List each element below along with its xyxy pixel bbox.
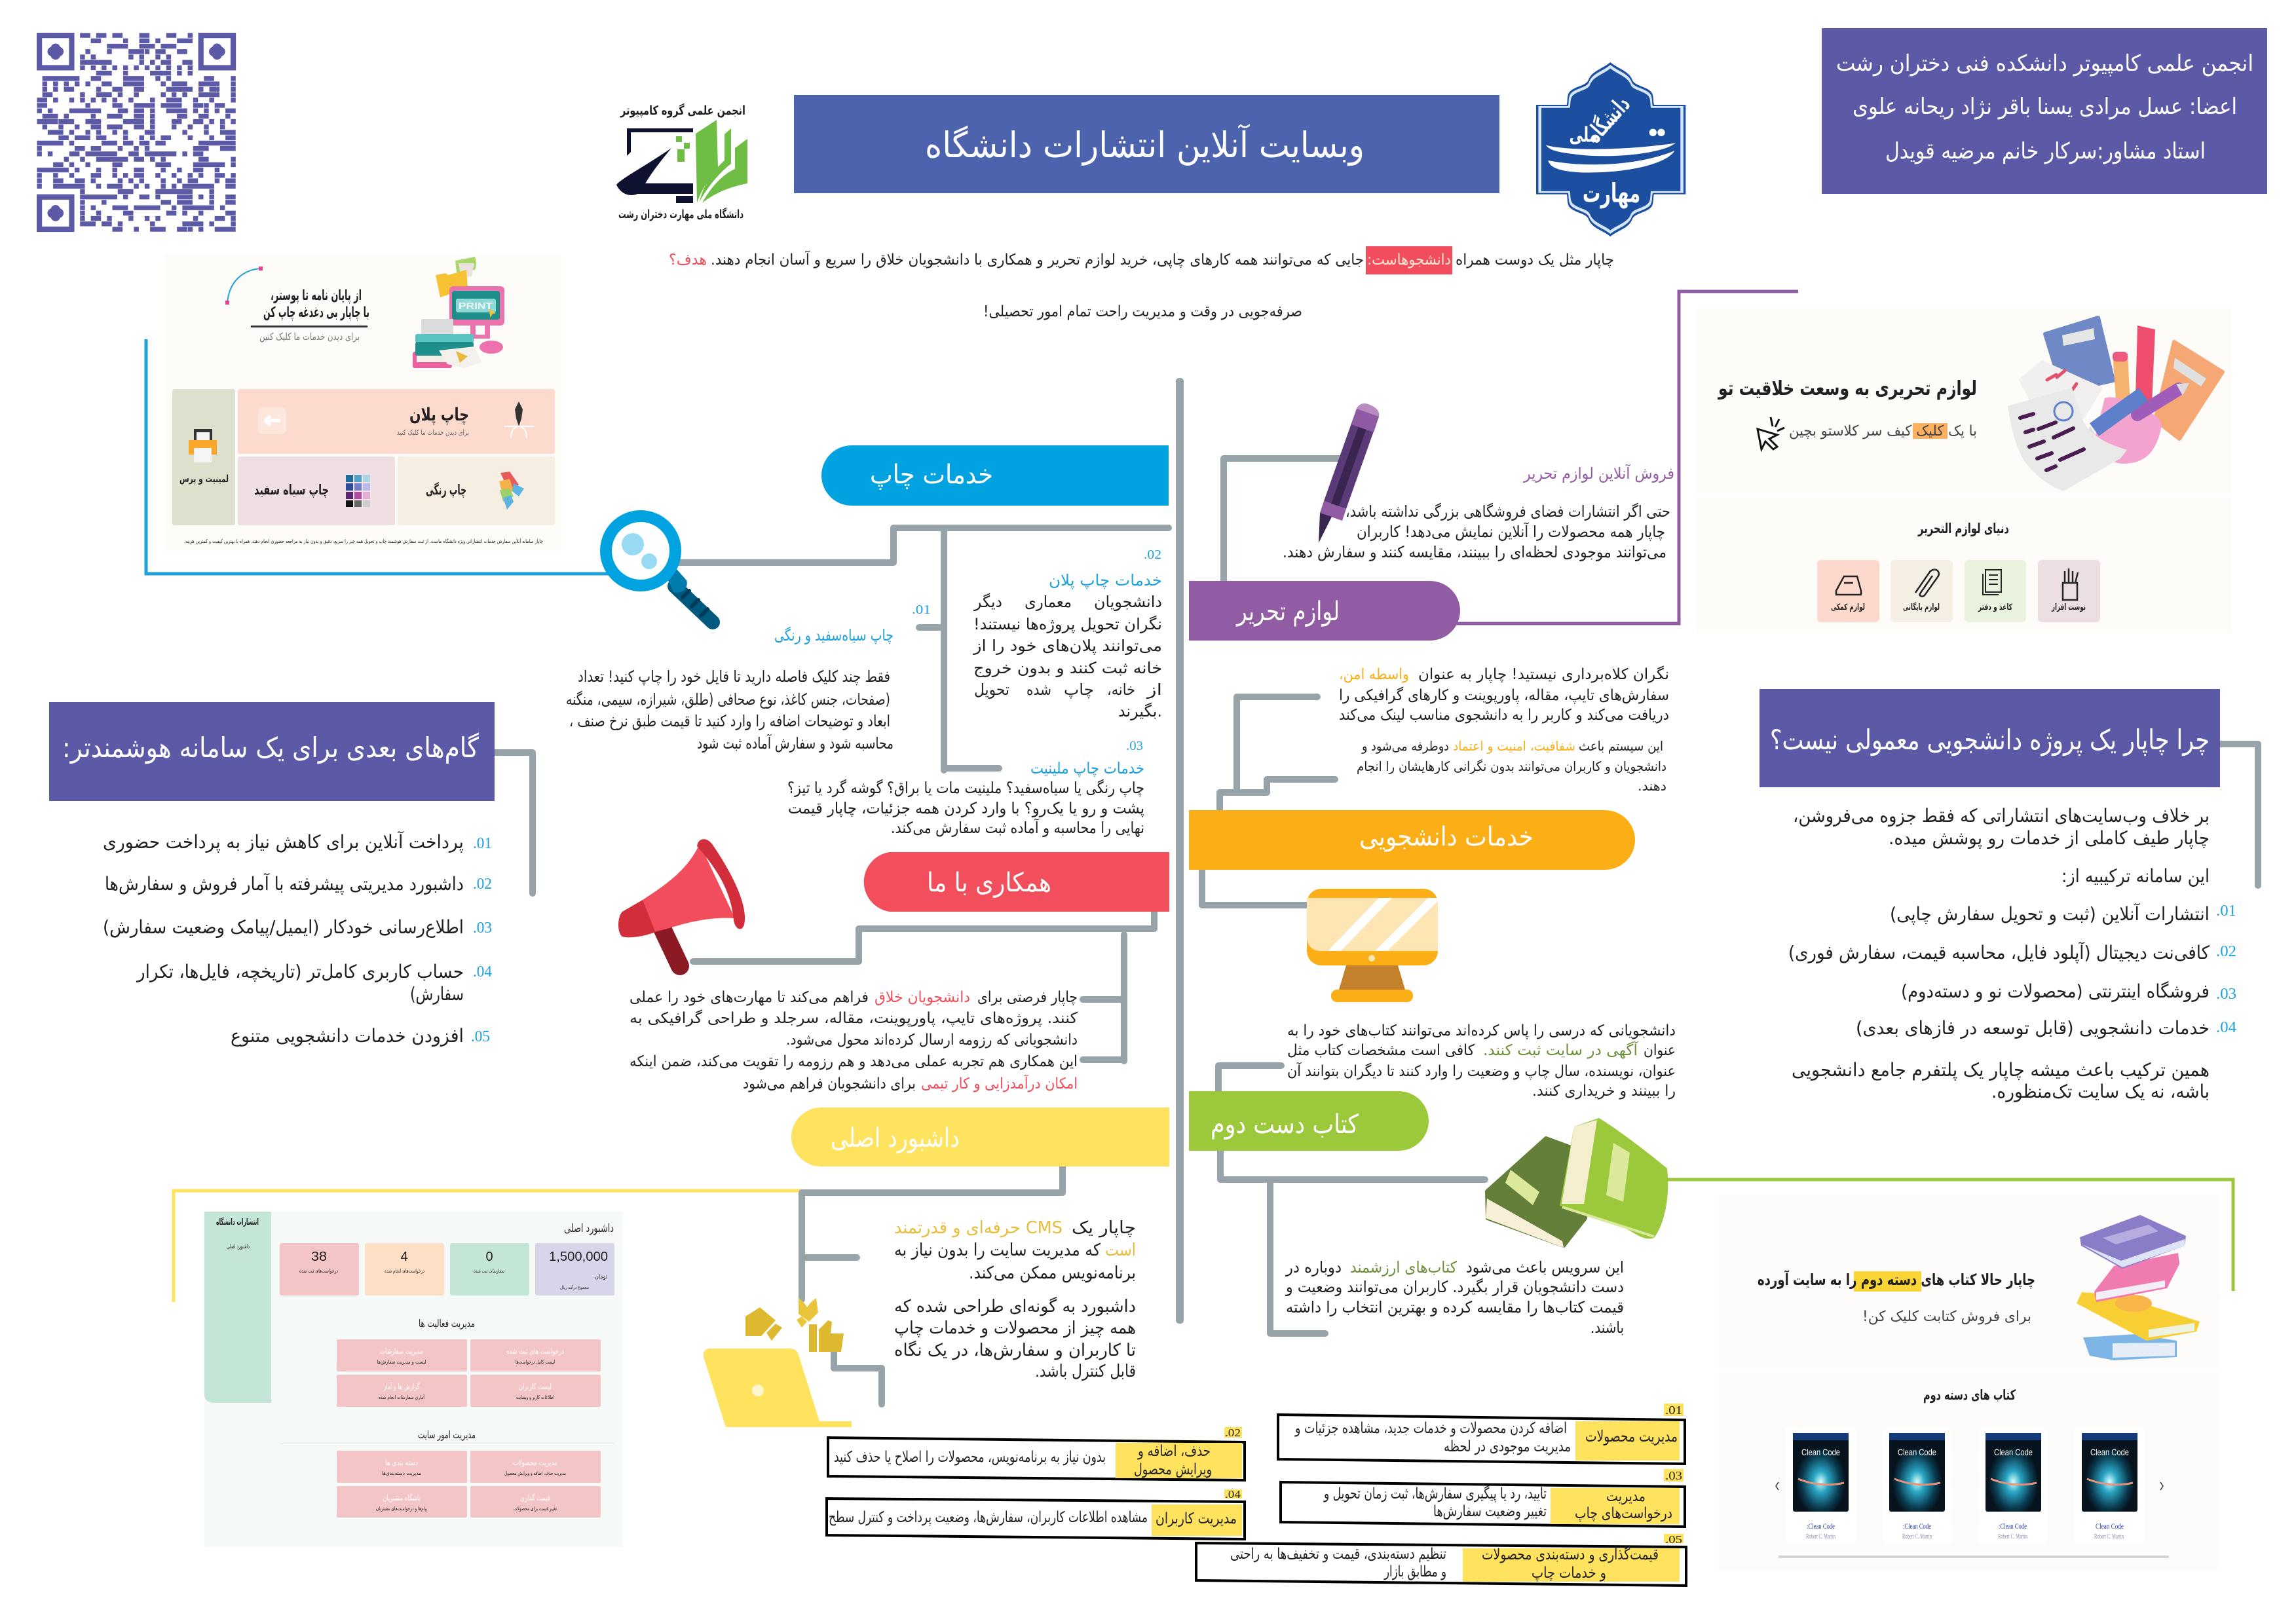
list: next steps: سفارش) — [410, 983, 464, 1005]
site management tiles — [337, 1451, 601, 1518]
book carousel: Robert C. Martin — [1806, 1533, 1835, 1540]
text: online stationery sales: فروش آنلاین لوازم تحریر — [1523, 464, 1674, 483]
box: product management: مدیریت موجودی در لحظه — [1444, 1438, 1571, 1455]
activity management tiles: اطلاعات کاربر و وبسایت — [516, 1394, 554, 1400]
text: plan printing: دیگر — [973, 593, 1002, 611]
category tiles: لوازم کمکی — [1831, 603, 1865, 612]
box: pricing and categories — [1196, 1533, 1686, 1586]
heading: print promo — [225, 267, 369, 343]
book carousel: Clean Code — [1898, 1447, 1936, 1457]
text: valuable books: دست دانشجویان قرار بگیرد. کاربران می‌توانند وضعیت و — [1285, 1278, 1624, 1296]
icon: green books — [1486, 1118, 1668, 1248]
logo: computer association — [616, 103, 747, 221]
text: plan printing: خانه، — [1107, 680, 1135, 699]
text: secure mediator — [1339, 665, 1669, 794]
site management tiles: تغییر قیمت برای محصولات — [514, 1506, 557, 1512]
list: next steps: داشبورد مدیریتی پیشرفته با آمار فروش و سفارش‌ها — [105, 873, 464, 895]
intro text: صرفه‌جویی در وقت و مدیریت راحت تمام امور تحصیلی! — [983, 303, 1302, 320]
site management tiles: پیام‌ها و درخواست‌های مشتریان — [376, 1506, 427, 1512]
pill: stationery — [1189, 581, 1460, 641]
heading: next steps: گام‌های بعدی برای یک سامانه هوشمندتر: — [62, 732, 479, 764]
text: second-hand book listing — [1287, 1022, 1676, 1100]
icon: laptop with thumbs up — [704, 1298, 852, 1427]
box: product management — [1278, 1404, 1685, 1464]
book carousel: :Clean Code — [1807, 1521, 1835, 1531]
text: black and white and colour printing — [566, 603, 931, 753]
tile: lamination: لمینیت و پرس — [179, 473, 229, 485]
header: team info: اعضا: عسل مرادی یسنا باقر نژاد ریحانه علوی — [1853, 94, 2237, 120]
box: edit products: حذف، اضافه و — [1137, 1443, 1211, 1460]
text: lamination printing: نهایی را محاسبه و آماده ثبت سفارش می‌کند. — [891, 818, 1144, 837]
text: second-hand book listing: آگهی در سایت ثبت کنند. — [1483, 1041, 1639, 1059]
box: product management: اضافه کردن محصولات و خدمات جدید، مشاهده جزئیات و — [1294, 1420, 1567, 1437]
sidebar — [204, 1212, 271, 1403]
tile: lamination — [172, 389, 235, 525]
text: secure mediator: این سیستم باعث — [1579, 738, 1663, 754]
icon: pencil — [1319, 403, 1379, 543]
text: valuable books: دوباره در — [1285, 1258, 1342, 1276]
panel: dashboard screenshot — [204, 1212, 623, 1547]
text: collaboration: برای دانشجویان فراهم می‌شود — [743, 1075, 916, 1092]
text: why Chapar description: خدمات دانشجویی (قابل توسعه در فازهای بعدی) — [1856, 1017, 2210, 1039]
book carousel: Clean Code — [1801, 1447, 1840, 1457]
activity management tiles: لیست کاربران — [519, 1382, 552, 1392]
category tiles: لوازم بایگانی — [1903, 602, 1940, 612]
sidebar: انتشارات دانشگاه — [216, 1217, 259, 1227]
stat cards: مجموع درآمد ریال — [560, 1284, 589, 1290]
box: product management: .01 — [1665, 1404, 1682, 1417]
text: second-hand book listing: دانشجویانی که درسی را پاس کرده‌اند می‌توانند کتاب‌های خود را به — [1287, 1022, 1676, 1039]
pill: student services — [1189, 810, 1635, 870]
book carousel: Clean Code — [2090, 1447, 2129, 1457]
stat cards: درخواست‌های ثبت شده — [299, 1268, 338, 1274]
text: collaboration: امکان درآمدزایی و کار تیمی — [921, 1074, 1078, 1092]
book carousel: :Clean Code — [1903, 1521, 1931, 1531]
pill: stationery: لوازم تحریر — [1235, 597, 1340, 627]
text: second-hand book listing: کافی است مشخصات کتاب مثل — [1287, 1042, 1475, 1059]
text: plan printing: شده — [1026, 680, 1051, 699]
heading: print promo: با چاپار بی دغدغه چاپ کن — [263, 305, 369, 321]
book carousel — [1776, 1427, 2169, 1558]
header: team info: استاد مشاور:سرکار خانم مرضیه قویدل — [1885, 138, 2206, 164]
logo: computer association: دانشگاه ملی مهارت دختران رشت — [618, 207, 743, 221]
text: lamination printing: پشت و رو یا یک‌رو؟ با وارد کردن همه جزئیات، چاپار قیمت — [788, 799, 1144, 817]
text: why Chapar description: کافی‌نت دیجیتال (آپلود فایل، محاسبه قیمت، سفارش فوری) — [1788, 942, 2210, 963]
text: black and white and colour printing: ابعاد و توضیحات اضافه را وارد کنید تا قیمت طبق نرخ صنف ، — [569, 712, 890, 730]
text: secure mediator: شفافیت، امنیت و اعتماد — [1453, 738, 1575, 754]
text: collaboration: این همکاری هم تجربه عملی می‌دهد و هم رزومه را تقویت می‌کند، ضمن اینکه — [630, 1053, 1078, 1070]
title banner: وبسایت آنلاین انتشارات دانشگاه — [925, 124, 1364, 166]
list: next steps: پرداخت آنلاین برای کاهش نیاز به پرداخت حضوری — [103, 831, 464, 853]
text: why Chapar description: چاپار طیف کاملی از خدمات رو پوشش میده. — [1889, 827, 2210, 849]
text: secure mediator: سفارش‌های تایپ، مقاله، پاورپوینت و کارهای گرافیکی را — [1339, 686, 1669, 704]
list: next steps: افزودن خدمات دانشجویی متنوع — [231, 1025, 464, 1047]
illustration: stack of books — [2077, 1215, 2200, 1360]
heading: stationery promo: با یک کلیک کیف سر کلاستو بچین — [1789, 423, 1977, 439]
caption: print promo: چاپار سامانه آنلاین سفارش خدمات انتشاراتی ویژه دانشگاه ماست. از ثبت سفارش هوشمند چاپ و تحویل همه چیز را سریع، دقیق و بدون نیاز به مراجعه حضوری انجام دهید. همراه با بهترین کیفیت و کمترین هزینه. — [184, 538, 543, 544]
box: print requests management — [1281, 1469, 1685, 1527]
stat cards: 38 — [311, 1250, 327, 1264]
illustration: printer and monitor — [413, 257, 504, 368]
text: why Chapar description: این سامانه ترکیبیه از: — [2061, 865, 2210, 887]
stat cards: تومان — [595, 1274, 607, 1280]
text: black and white and colour printing: فقط چند کلیک فاصله دارید تا فایل خود را چاپ کنید! تعداد — [578, 667, 890, 686]
pill: collaborate with us: همکاری با ما — [927, 868, 1051, 898]
text: black and white and colour printing: محاسبه شود و سفارش آماده ثبت شود — [697, 734, 894, 753]
text: CMS description — [894, 1218, 1136, 1381]
text: plan printing: معماری — [1025, 593, 1072, 611]
stat cards: 4 — [400, 1250, 408, 1264]
heading: why Chapar: چرا چاپار یک پروژه دانشجویی معمولی نیست؟ — [1770, 724, 2210, 756]
text: lamination printing: .03 — [1126, 739, 1143, 753]
text: lamination printing: چاپ رنگی یا سیاه‌سفید؟ ملینیت مات یا براق؟ گوشه گرد یا تیز؟ — [787, 779, 1144, 797]
box: print requests management: درخواست‌های چاپ — [1575, 1505, 1672, 1522]
list: next steps: اطلاع‌رسانی خودکار (ایمیل/پیامک وضعیت سفارش) — [103, 916, 464, 938]
header: team info — [1822, 28, 2267, 194]
connectors: grey branches — [495, 458, 2258, 1404]
text: plan printing: .بگیرند — [1118, 702, 1162, 720]
text: plan printing: دانشجویان — [1094, 593, 1162, 611]
text: valuable books — [1285, 1258, 1624, 1337]
text: collaboration: فراهم می‌کند تا مهارت‌های خود را عملی — [630, 989, 869, 1006]
tile: black and white printing: چاپ سیاه سفید — [254, 482, 329, 498]
site management tiles: قیمت گذاری — [520, 1493, 550, 1503]
box: pricing and categories: قیمت‌گذاری و دسته‌بندی محصولات — [1482, 1546, 1659, 1563]
list: next steps — [103, 831, 492, 1047]
text: collaboration: چاپار فرصتی برای — [977, 989, 1078, 1006]
logo: university emblem: مهارت — [1583, 178, 1640, 208]
box: print requests management: .03 — [1665, 1469, 1682, 1482]
category tiles — [1817, 560, 2100, 622]
site management tiles: باشگاه مشتریان — [383, 1493, 421, 1503]
text: lamination printing — [787, 739, 1144, 837]
site management tiles: مدیریت دسته‌بندی‌ها — [382, 1470, 421, 1476]
box: print requests management: تغییر وضعیت سفارش‌ها — [1433, 1503, 1547, 1520]
intro text: چاپار مثل یک دوست همراه — [1456, 252, 1614, 269]
box: product management: مدیریت محصولات — [1585, 1427, 1678, 1445]
panel: dashboard screenshot: داشبورد اصلی — [564, 1221, 614, 1235]
panel: stationery screenshot: دنیای لوازم التحریر — [1917, 521, 2009, 536]
activity management tiles: لیست کامل درخواست‌ها — [516, 1359, 555, 1365]
tile: plan printing: برای دیدن خدمات ما کلیک کنید — [397, 428, 469, 437]
text: plan printing: .02 — [1144, 548, 1161, 562]
text: collaboration — [630, 989, 1078, 1092]
text: CMS description: که مدیریت سایت را بدون نیاز به — [894, 1240, 1101, 1260]
text: CMS description: است — [1105, 1240, 1136, 1260]
list: next steps: حساب کاربری کامل‌تر (تاریخچه، فایل‌ها، تکرار — [136, 961, 464, 982]
category tiles: نوشت افزار — [2051, 603, 2086, 612]
text: plan printing: چاپ — [1064, 680, 1094, 699]
pill: second-hand books — [1189, 1091, 1429, 1151]
heading: second-hand promo: برای فروش کتابت کلیک کن! — [1862, 1309, 2031, 1325]
heading: stationery promo — [1717, 377, 1977, 449]
icon: monitor — [1307, 889, 1438, 1002]
text: secure mediator: دهند. — [1638, 778, 1666, 794]
panel: print services screenshot — [164, 255, 561, 551]
text: why Chapar description: .01 — [2216, 903, 2236, 920]
tile: colour printing: چاپ رنگی — [426, 481, 466, 498]
illustration: printer and monitor: PRINT — [459, 301, 493, 312]
text: online stationery sales: می‌توانند موجودی لحظه‌ای را ببینند، مقایسه کنند و سفارش دهند. — [1283, 543, 1666, 561]
text: why Chapar description: انتشارات آنلاین (ثبت و تحویل سفارش چاپی) — [1890, 903, 2210, 925]
text: plan printing: تحویل — [974, 680, 1009, 699]
text: why Chapar description: باشه، نه یک سایت تک‌منظوره. — [1991, 1081, 2210, 1102]
book carousel: :Clean Code — [1999, 1521, 2027, 1531]
category tiles: کاغذ و دفتر — [1978, 603, 2012, 612]
text: CMS description: چاپار یک — [1072, 1218, 1136, 1238]
tile: plan printing: چاپ پلان — [409, 405, 469, 425]
text: CMS description: CMS حرفه‌ای و قدرتمند — [894, 1218, 1063, 1238]
text: online stationery sales — [1283, 464, 1674, 561]
book carousel: Robert C. Martin — [1998, 1533, 2027, 1540]
activity management tiles: لیست و مدیریت سفارش‌ها — [377, 1359, 426, 1365]
pill: student services: خدمات دانشجویی — [1359, 822, 1534, 852]
list: next steps: .05 — [471, 1028, 490, 1045]
text: second-hand book listing: را ببینند و خریداری کنند. — [1532, 1083, 1676, 1100]
connectors: coloured frames — [146, 291, 2233, 1302]
pill: main dashboard: داشبورد اصلی — [831, 1123, 960, 1153]
text: CMS description: همه چیز از محصولات و خدمات چاپ — [894, 1318, 1136, 1338]
heading: stationery promo: لوازم تحریری به وسعت خلاقیت تو — [1717, 377, 1977, 400]
book carousel: Clean Code — [1994, 1447, 2033, 1457]
text: black and white and colour printing: چاپ سیاه‌سفید و رنگی — [774, 626, 894, 644]
pill: main dashboard — [791, 1108, 1169, 1166]
book carousel: Clean Code — [2096, 1521, 2124, 1531]
text: plan printing: می‌توانند پلان‌های خود را از — [973, 637, 1162, 655]
text: secure mediator: دانشجویان و کاربران می‌توانند بدون نگرانی کارهایشان را انجام — [1357, 758, 1666, 774]
panel: dashboard screenshot: مدیریت امور سایت — [418, 1428, 476, 1442]
stat cards — [280, 1243, 614, 1295]
icon: megaphone — [618, 839, 745, 966]
heading: print promo: از پایان نامه تا پوستر، — [271, 288, 362, 304]
heading: second-hand promo: چاپار حالا کتاب های دسته دوم را به سایت آورده — [1758, 1270, 2035, 1289]
pill: print services — [821, 445, 1169, 506]
sidebar: داشبورد اصلی — [227, 1244, 250, 1250]
text: plan printing: خانه ثبت کنند و بدون خروج — [973, 659, 1162, 677]
logo: university emblem — [1536, 62, 1685, 236]
text: second-hand book listing: عنوان — [1644, 1042, 1676, 1059]
text: plan printing — [973, 548, 1162, 720]
tile: black and white printing — [238, 456, 395, 525]
text: collaboration: دانشجویانی که رزومه ارسال کرده‌اند محول می‌شود. — [786, 1032, 1078, 1049]
box: pricing and categories: و مطابق بازار — [1383, 1563, 1446, 1580]
heading: second-hand promo — [1758, 1270, 2035, 1325]
book carousel: Robert C. Martin — [1902, 1533, 1932, 1540]
pill: print services: خدمات چاپ — [870, 460, 993, 490]
text: valuable books: این سرویس باعث می‌شود — [1466, 1258, 1624, 1276]
text: secure mediator: واسطه امن، — [1339, 666, 1409, 683]
logo: university emblem: ملی — [1570, 124, 1598, 147]
book carousel: Robert C. Martin — [2094, 1533, 2124, 1540]
text: why Chapar description: بر خلاف وب‌سایت‌های انتشاراتی که فقط جزوه می‌فروشن، — [1793, 805, 2210, 827]
box: edit products: .02 — [1225, 1426, 1241, 1439]
text: secure mediator: دریافت می‌کند و کاربر را به دانشجوی مناسب لینک می‌کند — [1339, 707, 1669, 724]
stat cards: درخواست‌های انجام شده — [385, 1268, 424, 1274]
text: why Chapar description: .02 — [2216, 943, 2236, 960]
header: team info: انجمن علمی کامپیوتر دانشکده فنی دختران رشت — [1836, 50, 2253, 77]
text: online stationery sales: چاپار همه محصولات را آنلاین نمایش می‌دهد! کاربران — [1357, 522, 1665, 541]
box: edit products — [828, 1426, 1245, 1480]
box: user management: مدیریت کاربران — [1156, 1510, 1237, 1527]
text: valuable books: کتاب‌های ارزشمند — [1350, 1258, 1458, 1276]
intro text — [669, 246, 1614, 320]
logo: university emblem: دانشگاه — [1581, 91, 1636, 148]
box: pricing and categories: و خدمات چاپ — [1532, 1565, 1606, 1582]
activity management tiles: مدیریت سفارشات — [380, 1347, 423, 1356]
text: secure mediator: دوطرفه می‌شود و — [1361, 738, 1449, 754]
heading: print promo: برای دیدن خدمات ما کلیک کنین — [259, 331, 360, 343]
panel: stationery screenshot — [1696, 308, 2231, 633]
tile: plan printing — [238, 389, 555, 454]
text: why Chapar description — [1788, 805, 2236, 1102]
text: CMS description: برنامه‌نویس ممکن می‌کند. — [969, 1263, 1136, 1283]
icon: QR code — [39, 35, 233, 229]
list: next steps: .02 — [473, 876, 492, 893]
panel: second-hand books screenshot: کتاب های دسته دوم — [1923, 1387, 2016, 1403]
box: print requests management: تایید، رد یا پیگیری سفارش‌ها، ثبت زمان تحویل و — [1323, 1485, 1547, 1502]
text: why Chapar description: همین ترکیب باعث میشه چاپار یک پلتفرم جامع دانشجویی — [1792, 1059, 2210, 1081]
box: user management: مشاهده اطلاعات کاربران، سفارش‌ها، وضعیت پرداخت و کنترل سطح — [829, 1509, 1148, 1526]
activity management tiles: درخواست های ثبت شده — [506, 1347, 564, 1356]
text: CMS description: قابل کنترل باشد. — [1035, 1362, 1136, 1381]
heading: next steps — [49, 702, 495, 801]
central spine — [1176, 378, 1184, 1324]
box: edit products: بدون نیاز به برنامه‌نویس، محصولات را اصلاح یا حذف کنید — [834, 1449, 1106, 1466]
title banner — [794, 95, 1499, 193]
text: second-hand book listing: عنوان، نویسنده، سال چاپ و وضعیت را وارد کنند تا دیگران بتوانند آن — [1287, 1062, 1676, 1080]
text: why Chapar description: .03 — [2216, 986, 2236, 1003]
site management tiles: دسته بندی ها — [385, 1458, 418, 1467]
box: user management — [827, 1488, 1245, 1539]
activity management tiles: گزارش ها و آمار — [383, 1381, 420, 1392]
box: print requests management: مدیریت — [1606, 1488, 1646, 1505]
stat cards: 0 — [485, 1250, 493, 1264]
intro text: جایی که می‌توانند همه کارهای چاپی، خرید لوازم تحریر و همکاری با دانشجویان خلاق را سریع و آسان انجام دهند. — [711, 250, 1364, 269]
intro text: دانشجوهاست: — [1367, 252, 1451, 269]
logo: computer association: انجمن علمی گروه کامپیوتر — [620, 103, 745, 118]
site management tiles: مدیریت محصولات — [513, 1458, 557, 1468]
text: why Chapar description: .04 — [2216, 1019, 2236, 1036]
list: next steps: .01 — [473, 835, 492, 852]
list: next steps: .04 — [473, 963, 492, 980]
activity management tiles — [337, 1339, 601, 1407]
box: pricing and categories: .05 — [1665, 1533, 1682, 1546]
box: edit products: ویرایش محصول — [1134, 1461, 1212, 1478]
illustration: stationery — [2008, 318, 2223, 491]
text: collaboration: کنند. پروژه‌های تایپ، پاورپوینت، مقاله، سرجلد و طراحی گرافیکی به — [630, 1009, 1078, 1027]
text: valuable books: قیمت کتاب‌ها را مقایسه کرده و بهترین انتخاب را داشته — [1286, 1298, 1624, 1316]
box: user management: .04 — [1225, 1488, 1241, 1500]
stat cards: 1,500,000 — [549, 1250, 608, 1264]
text: CMS description: داشبورد به گونه‌ای طراحی شده که — [894, 1296, 1136, 1316]
tile: colour printing — [398, 456, 555, 525]
text: valuable books: باشند. — [1590, 1318, 1624, 1337]
activity management tiles: آماری سفارشات انجام شده — [379, 1394, 425, 1400]
text: plan printing: خدمات چاپ پلان — [1049, 571, 1162, 589]
stat cards: سفارشات ثبت شده — [474, 1268, 504, 1274]
pill: second-hand books: کتاب دست دوم — [1211, 1109, 1359, 1140]
icon: magnifier — [606, 516, 713, 622]
text: collaboration: دانشجویان خلاق — [875, 989, 970, 1006]
list: next steps: .03 — [473, 920, 492, 937]
text: lamination printing: خدمات چاپ ملینیت — [1030, 759, 1144, 777]
panel: dashboard screenshot: مدیریت فعالیت ها — [419, 1317, 475, 1330]
text: plan printing: از — [1146, 680, 1162, 699]
text: why Chapar description: فروشگاه اینترنتی (محصولات نو و دسته‌دوم) — [1901, 980, 2210, 1002]
pill: collaborate with us — [864, 852, 1169, 912]
text: plan printing: نگران تحویل پروژه‌ها نیستند! — [973, 615, 1162, 633]
text: online stationery sales: حتی اگر انتشارات فضای فروشگاهی بزرگی نداشته باشد، — [1346, 502, 1670, 521]
site management tiles: مدیریت حذف، اضافه و ویرایش محصول — [504, 1470, 566, 1476]
text: secure mediator: نگران کلاه‌برداری نیستید! چاپار به عنوان — [1418, 665, 1669, 683]
box: pricing and categories: تنظیم دسته‌بندی، قیمت و تخفیف‌ها به راحتی — [1230, 1546, 1446, 1563]
heading: why Chapar — [1760, 689, 2220, 787]
text: black and white and colour printing: (صفحات، جنس کاغذ، نوع صحافی (طلق، شیرازه، سیمی، منگنه — [566, 690, 890, 709]
text: black and white and colour printing: .01 — [912, 603, 931, 617]
intro text: هدف؟ — [669, 252, 707, 269]
panel: second-hand books screenshot — [1718, 1195, 2220, 1570]
text: CMS description: تا کاربران و سفارش‌ها، در یک نگاه — [894, 1340, 1136, 1360]
